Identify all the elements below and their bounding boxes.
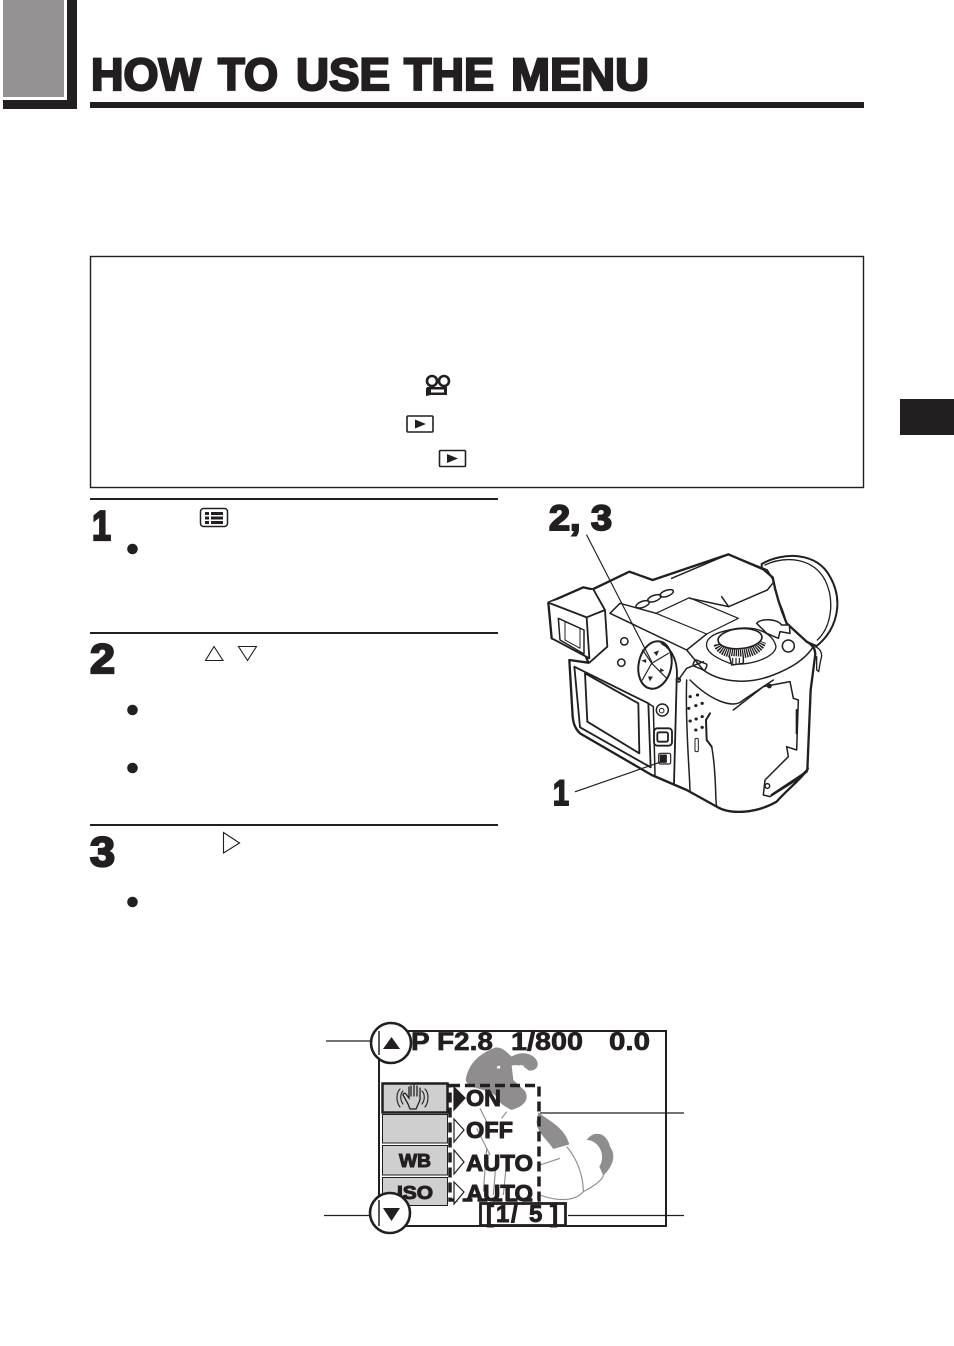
leader line to d-pad [587,535,652,662]
menu arrows [454,1087,465,1204]
title: MENU [511,49,649,100]
side tab [900,399,954,435]
main body silhouette [548,554,815,812]
leader lines [324,1041,684,1216]
menu labels: ON [466,1085,501,1111]
lens [762,556,837,646]
d-pad [634,638,676,692]
monitor screen diagram [324,1023,684,1233]
top plate display [656,598,738,634]
dog picture [466,1048,613,1200]
flash hump [672,554,774,607]
menu labels: ISO [397,1183,433,1203]
icon: menu button [200,508,228,526]
leader line to menu button [575,762,662,792]
corner tab: grey block with black frame [3,0,77,109]
step number 3: 3 [90,828,115,875]
step 2 [90,632,498,773]
step 3 [90,824,498,907]
bullet [127,705,138,715]
top buttons [635,599,650,610]
icon: right triangle [224,832,240,853]
speaker holes and seam [689,695,702,730]
menu labels: AUTO [466,1180,533,1206]
dashed selection frame [450,1086,539,1200]
small control buttons [656,704,668,716]
step number 2: 2 [90,635,115,682]
down arrow circle [370,1193,410,1233]
screen readout [411,1028,650,1056]
grip ridge [662,643,677,783]
camera illustration [548,535,837,812]
icon: playback box [440,450,466,466]
title: THE [404,49,494,100]
menu labels: AUTO [466,1150,533,1176]
bullet [127,544,138,554]
title: USE [296,49,390,100]
page indicator: [1/5] [486,1201,558,1228]
icon: movie camera [426,376,449,396]
title: HOW [91,49,202,100]
step 1 [90,498,498,554]
icon: shake reduction hand [397,1085,428,1109]
menu labels: WB [399,1151,431,1171]
up arrow circle [371,1023,411,1063]
panel: note box [90,256,864,488]
screen frame [379,1031,666,1226]
bullet [127,763,138,773]
title [90,49,864,108]
title: TO [218,49,278,100]
icon: up triangle [206,646,223,660]
screen readout: P F2.8 [411,1028,493,1056]
menu labels: OFF [466,1117,513,1143]
mode dial [707,628,776,664]
menu labels [397,1085,533,1206]
menu tabs [382,1084,448,1206]
callout label 2, 3: 2, 3 [549,499,612,538]
bullet [127,897,138,907]
shoulder curves [703,647,813,681]
strap [815,647,822,672]
screen readout: 1/800 [511,1028,583,1056]
icon: playback box [407,416,433,432]
LCD [574,667,651,767]
step number 1: 1 [92,502,111,549]
callout label 1: 1 [553,774,569,813]
screen readout: 0.0 [609,1028,650,1056]
icon: down triangle [238,646,256,660]
eyepiece [548,589,607,663]
small round buttons [621,638,628,645]
